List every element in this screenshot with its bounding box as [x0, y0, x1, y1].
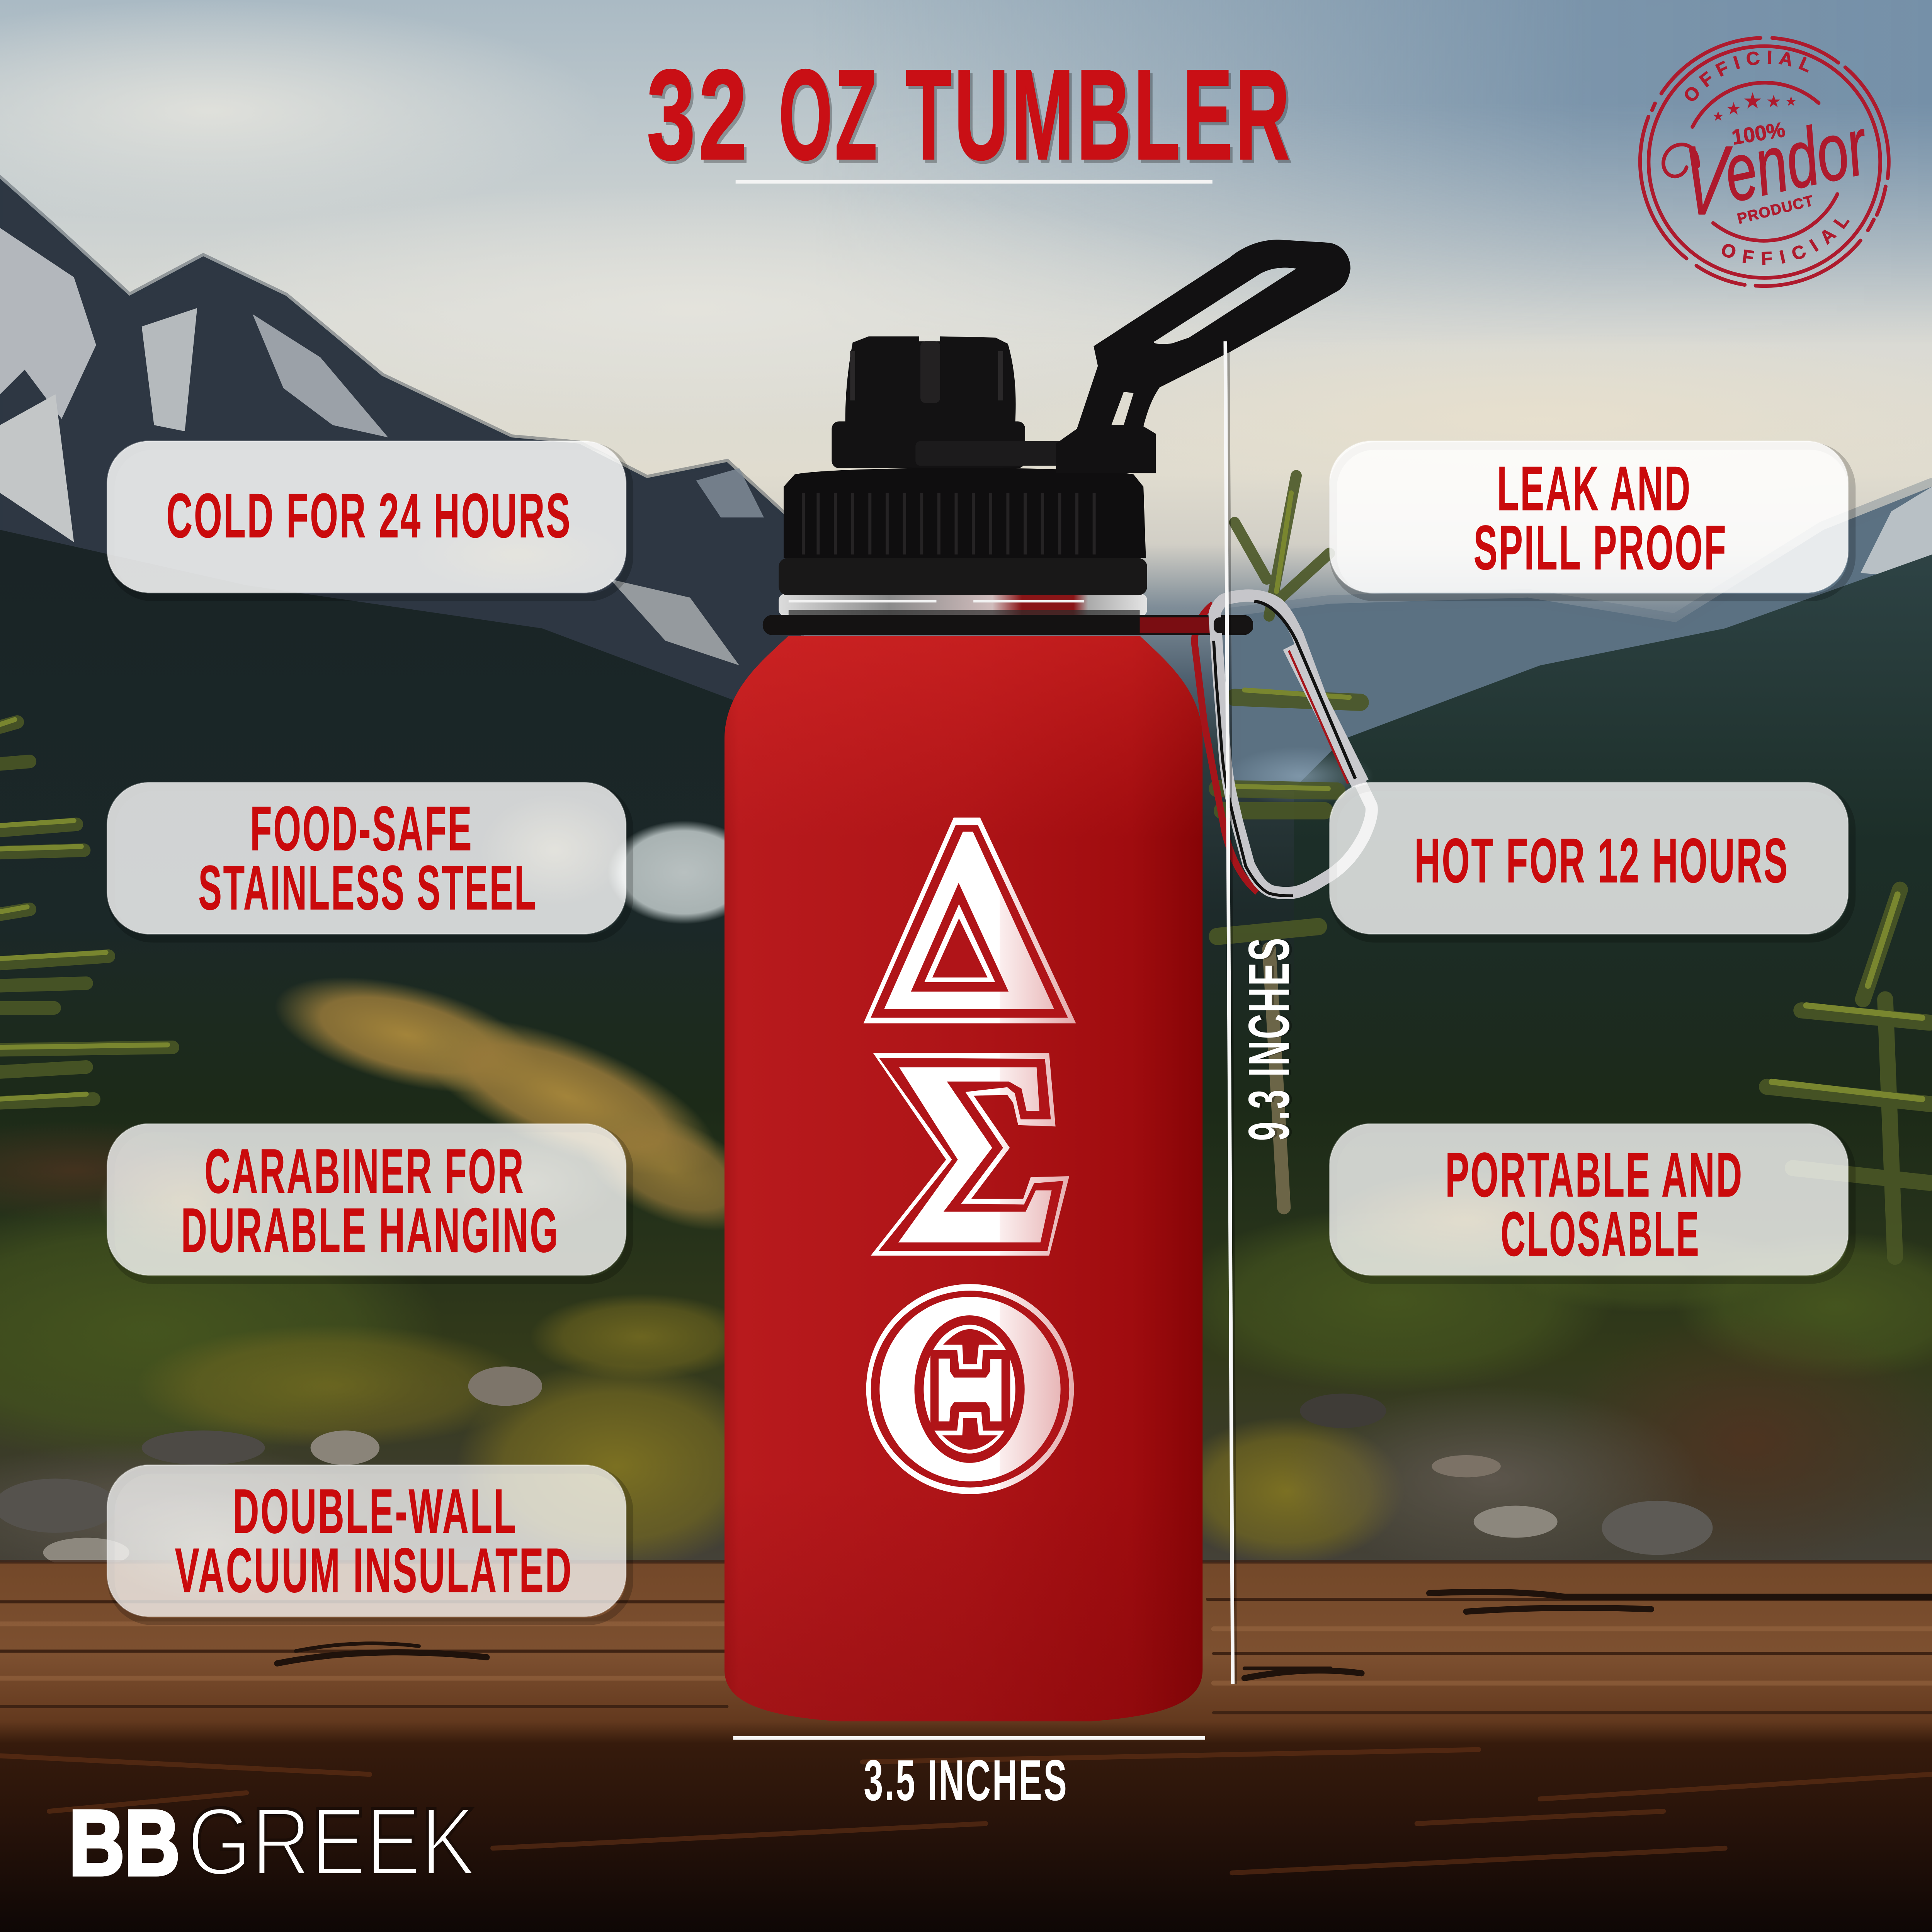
pill: portable and closable	[1330, 1124, 1852, 1280]
label: 3.5 inches: 3.5 INCHES	[864, 1748, 1068, 1813]
lid	[779, 337, 1147, 595]
title: OZ	[781, 46, 882, 189]
pill: leak and spill proof: LEAK AND	[1497, 454, 1692, 524]
pine trees	[0, 476, 1930, 1257]
pill: food-safe stainless steel	[107, 782, 629, 939]
bottle body	[724, 636, 1202, 1721]
pill: carabiner for durable hanging: DURABLE HANGING	[181, 1196, 560, 1265]
logo: BB Greek	[69, 1788, 476, 1895]
stamp: official 100% vendor product: ★	[1743, 88, 1762, 114]
pill: food-safe stainless steel: FOOD-SAFE	[250, 794, 473, 864]
tumbler bottle	[724, 240, 1372, 1721]
gasket ring and strap	[763, 615, 1253, 635]
stamp: official 100% vendor product: OFFICIAL	[1680, 47, 1820, 106]
logo: BB Greek: BB	[69, 1791, 180, 1895]
stamp: official 100% vendor product: ★	[1712, 108, 1724, 124]
letter sigma	[871, 1053, 1069, 1256]
label: 9.3 inches: 9.3 INCHES	[1239, 936, 1304, 1141]
title: TUMBLER	[908, 46, 1295, 189]
pill: double-wall vacuum insulated: DOUBLE-WALL	[233, 1476, 517, 1546]
title	[647, 43, 1295, 189]
stamp: official 100% vendor product: ★	[1785, 94, 1797, 109]
title: TUMBLER	[906, 43, 1293, 186]
label: 9.3 inches: 9.3 INCHES	[1236, 936, 1301, 1141]
pill: portable and closable: CLOSABLE	[1501, 1199, 1701, 1269]
carabiner red strap	[1195, 604, 1257, 892]
pill: carabiner for durable hanging: CARABINER FOR	[204, 1136, 525, 1206]
pill: cold for 24 hours	[107, 441, 629, 598]
steel neck	[779, 594, 1147, 616]
pill: food-safe stainless steel: STAINLESS STEEL	[198, 853, 537, 923]
carabiner	[1214, 595, 1372, 896]
pill: hot for 12 hours	[1330, 782, 1852, 939]
letter theta	[866, 1284, 1074, 1494]
stamp: official 100% vendor product: ★	[1766, 91, 1781, 111]
greek letters	[864, 818, 1076, 1494]
lid handle loop	[1056, 240, 1350, 473]
pill: carabiner for durable hanging	[99, 1124, 629, 1280]
logo: BB Greek: GREEK	[187, 1788, 476, 1895]
title: OZ	[779, 43, 880, 186]
pill: double-wall vacuum insulated: VACUUM INSULATED	[175, 1536, 573, 1605]
label: 9.3 inches	[1236, 936, 1304, 1141]
height dimension line	[1223, 341, 1237, 1684]
stamp: official 100% vendor product: PRODUCT	[1736, 192, 1816, 227]
stamp: official 100% vendor product	[1640, 38, 1889, 286]
pill: leak and spill proof	[1330, 441, 1852, 598]
pill: leak and spill proof: SPILL PROOF	[1474, 513, 1728, 583]
pill: cold for 24 hours: COLD FOR 24 HOURS	[166, 481, 572, 551]
letter delta	[864, 818, 1076, 1023]
stamp: official 100% vendor product: ★	[1726, 99, 1742, 119]
stamp: official 100% vendor product: endor	[1716, 100, 1877, 219]
stamp: official 100% vendor product: OFFICIAL	[1718, 204, 1858, 269]
title underline	[736, 180, 1213, 184]
width dimension line	[733, 1736, 1205, 1740]
stamp: official 100% vendor product: V	[1683, 126, 1733, 236]
title: 32	[647, 43, 750, 186]
stamp: official 100% vendor product: 100%	[1730, 118, 1787, 149]
title: 32	[649, 46, 753, 189]
pill: double-wall vacuum insulated	[99, 1465, 629, 1621]
